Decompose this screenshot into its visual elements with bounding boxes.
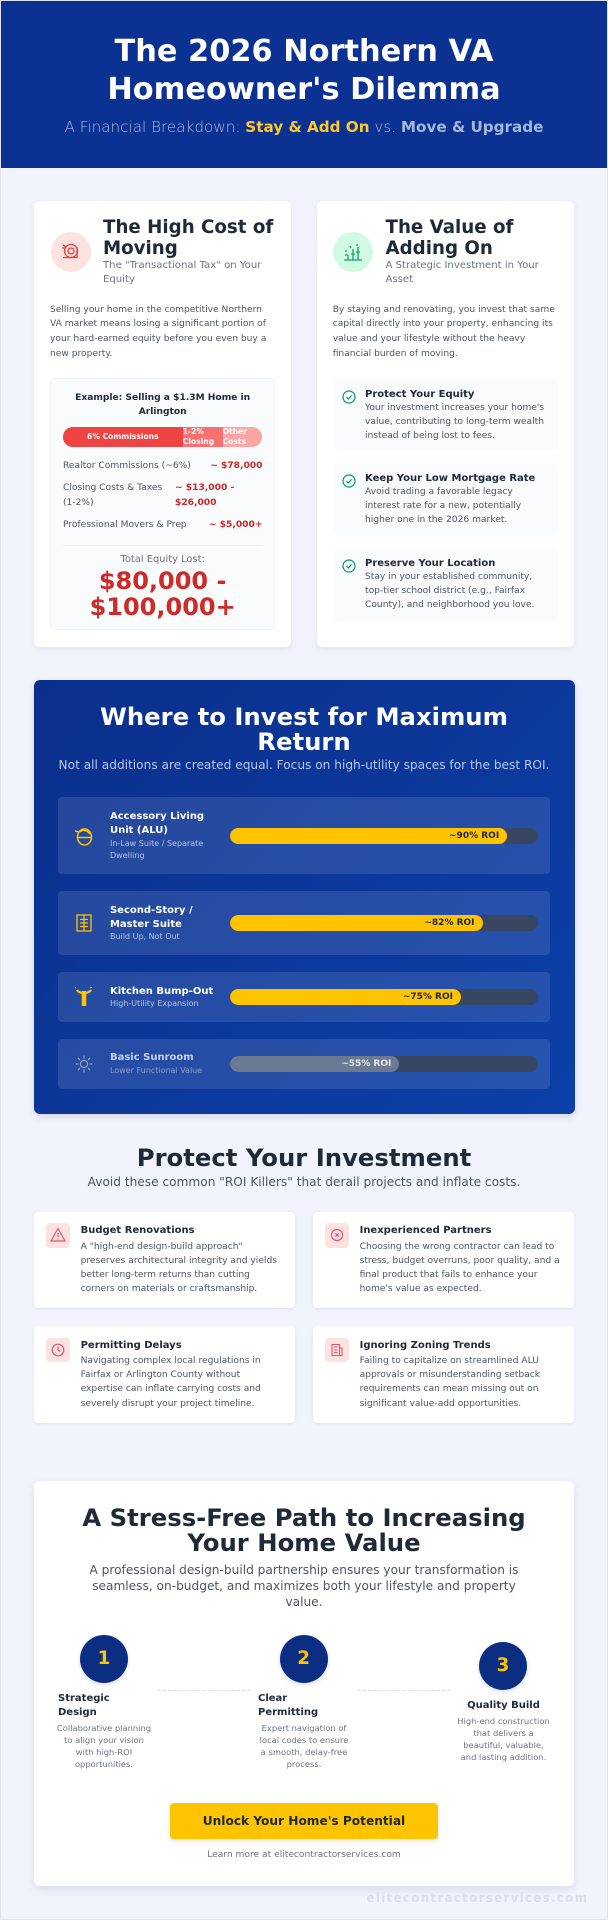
intro paragraph: financial burden of moving. — [333, 349, 458, 359]
section heading: protect your investment: Protect Your Investment — [137, 1143, 471, 1172]
step title — [58, 1693, 110, 1718]
row: closing costs — [63, 483, 234, 508]
step text: local codes to ensure — [260, 1735, 348, 1745]
section subtitle: Avoid these common "ROI Killers" that derail projects and inflate costs. — [88, 1175, 520, 1189]
commissions segment — [63, 427, 183, 447]
icon: check — [342, 559, 356, 573]
roi row: second story — [58, 891, 550, 955]
card text — [81, 1356, 261, 1408]
row title: Unit (ALU) — [110, 825, 168, 836]
intro paragraph: By staying and renovating, you invest that same — [333, 304, 555, 314]
benefit: protect equity — [334, 379, 558, 451]
icon: check — [342, 474, 356, 488]
benefit: low mortgage rate — [334, 463, 558, 536]
icon: ALU — [74, 828, 92, 846]
roi row: sunroom — [58, 1039, 550, 1089]
intro paragraph: VA market means losing a significant portion of — [50, 319, 266, 329]
closing segment: Closing — [183, 437, 214, 446]
card text: expertise can inflate carrying costs and — [81, 1384, 261, 1394]
step text: process. — [287, 1759, 321, 1769]
icon: second story — [76, 914, 92, 932]
benefit title: Preserve Your Location — [365, 558, 495, 569]
roi row: kitchen — [58, 972, 550, 1022]
call to action button: Unlock Your Home's Potential — [203, 1814, 405, 1828]
step title: Design — [58, 1707, 97, 1718]
row: closing costs: (1-2%) — [63, 498, 94, 508]
card text: approvals or misunderstanding setback — [360, 1370, 540, 1380]
card title: Budget Renovations — [81, 1225, 195, 1236]
section subtitle: seamless, on-budget, and maximizes both your lifestyle and property — [92, 1579, 516, 1593]
heading — [386, 217, 514, 259]
row: closing costs: $26,000 — [175, 498, 216, 508]
section heading: Return — [257, 726, 351, 756]
icon: warning — [46, 1223, 70, 1248]
roi bar 82% — [230, 915, 538, 931]
icon: sun — [76, 1056, 92, 1072]
card text: A "high-end design-build approach" — [81, 1242, 243, 1252]
section subtitle: Not all additions are created equal. Focus on high-utility spaces for the best ROI. — [59, 758, 549, 772]
benefit text: top-tier school district (e.g., Fairfax — [365, 586, 525, 596]
row title: Second-Story / — [110, 905, 193, 916]
stacked cost bar — [63, 427, 262, 447]
roi bar 82%: ~82% ROI — [424, 918, 475, 928]
card text: Fairfax or Arlington County without — [81, 1370, 240, 1380]
other costs segment: Other — [223, 427, 247, 436]
row: realtor commissions: Realtor Commissions (~6%) — [63, 461, 191, 471]
step 1 — [57, 1635, 151, 1769]
heading: The High Cost of — [103, 217, 273, 238]
step text — [57, 1723, 151, 1769]
call to action button — [170, 1803, 438, 1839]
benefit text — [365, 402, 544, 441]
roi bar 90% — [230, 828, 538, 844]
killer card: budget renovations — [34, 1212, 295, 1308]
step title: Permitting — [258, 1707, 318, 1718]
step text: with high-ROI — [76, 1747, 132, 1757]
row title: Basic Sunroom — [110, 1052, 194, 1063]
benefit text: Avoid trading a favorable legacy — [365, 487, 513, 497]
step text: opportunities. — [75, 1759, 133, 1769]
benefit text — [365, 487, 521, 525]
step text: that delivers a — [473, 1728, 534, 1738]
step text: Expert navigation of — [262, 1723, 346, 1733]
title — [107, 34, 501, 107]
row description: Build Up, Not Out — [110, 932, 180, 941]
sub-heading — [102, 260, 262, 285]
header banner — [0, 0, 608, 168]
benefit: preserve location — [334, 548, 558, 621]
sub-heading: Equity — [103, 274, 135, 285]
row description: Lower Functional Value — [110, 1066, 202, 1075]
step number — [479, 1642, 527, 1690]
sub-heading: The "Transactional Tax" on Your — [103, 260, 261, 271]
card text: requirements can mean missing out on — [360, 1384, 538, 1394]
card text — [360, 1242, 560, 1294]
row description: In-Law Suite / Separate — [110, 839, 203, 848]
benefit text: interest rate for a new, potentially — [365, 501, 521, 511]
icon: x circle — [325, 1223, 349, 1248]
step text: and lasting addition. — [461, 1752, 546, 1762]
section subtitle: A professional design-build partnership ensures your transformation is — [89, 1563, 518, 1577]
benefit text — [365, 572, 534, 610]
benefit text: County), and neighborhood you love. — [365, 600, 534, 610]
card text: corners on materials or craftsmanship. — [81, 1284, 257, 1294]
card title: Inexperienced Partners — [360, 1225, 492, 1236]
card text: Failing to capitalize on streamlined ALU — [360, 1356, 539, 1366]
step number: 2 — [297, 1648, 310, 1669]
row: movers: ~ $5,000+ — [209, 520, 262, 530]
row: realtor commissions — [63, 461, 262, 471]
heading — [103, 217, 274, 259]
cost example box — [50, 378, 275, 630]
step title: Clear — [258, 1693, 287, 1704]
card text: significant value-add opportunities. — [360, 1398, 521, 1408]
example title — [75, 393, 250, 417]
killer card: inexperienced partners — [313, 1212, 574, 1308]
row: closing costs: Closing Costs & Taxes — [63, 483, 162, 493]
benefit title: Protect Your Equity — [365, 388, 474, 400]
card text: better long-term returns than cutting — [81, 1270, 250, 1280]
total amount — [90, 567, 236, 621]
section heading: Where to Invest for Maximum — [100, 702, 508, 730]
benefit text: instead of being lost to fees. — [365, 431, 495, 441]
total amount: $100,000+ — [90, 593, 236, 621]
card title: Ignoring Zoning Trends — [360, 1340, 491, 1351]
section heading — [100, 702, 508, 756]
panel: high cost of moving — [34, 201, 291, 647]
panel: value of adding on — [317, 201, 574, 647]
step text — [454, 1715, 554, 1763]
closing segment: 1-2% — [183, 427, 204, 436]
icon: green growth chart — [333, 232, 373, 272]
icon: check — [342, 390, 356, 404]
roi bar 55%: ~55% ROI — [341, 1059, 391, 1069]
commissions segment: 6% Commissions — [87, 432, 159, 441]
total label: Total Equity Lost: — [120, 554, 205, 565]
step text — [260, 1723, 348, 1769]
row: movers — [63, 520, 262, 530]
benefit text: higher one in the 2026 market. — [365, 515, 507, 525]
row title — [110, 811, 204, 836]
row description — [110, 839, 203, 860]
icon: red target coil — [51, 232, 91, 272]
card text: home's value as expected. — [360, 1284, 482, 1294]
sub-heading: Asset — [386, 274, 413, 285]
card text: stress, budget overruns, poor quality, and a — [360, 1256, 560, 1266]
heading: Adding On — [386, 238, 493, 259]
roi bar 75% — [230, 989, 538, 1005]
title: Homeowner's Dilemma — [107, 72, 501, 107]
row title: Kitchen Bump-Out — [110, 986, 213, 997]
heading: Moving — [103, 238, 178, 259]
section heading: Your Home Value — [187, 1528, 421, 1557]
killer card: zoning trends — [313, 1326, 574, 1423]
row description: High-Utility Expansion — [110, 999, 199, 1008]
intro paragraph: new property. — [50, 349, 112, 359]
intro paragraph — [50, 304, 266, 359]
section heading — [82, 1503, 526, 1557]
example title: Arlington — [139, 407, 187, 417]
card text: final product that fails to enhance your — [360, 1270, 537, 1280]
killer card: permitting delays — [34, 1326, 295, 1423]
sub-heading — [386, 260, 539, 285]
row title — [110, 905, 193, 930]
icon: clock — [46, 1338, 70, 1362]
other costs segment — [223, 427, 247, 446]
card text — [80, 1242, 277, 1294]
section heading: A Stress-Free Path to Increasing — [82, 1503, 526, 1532]
intro paragraph: capital directly into your property, enhancing its — [333, 319, 553, 329]
roi bar 75%: ~75% ROI — [403, 992, 453, 1002]
row title: Master Suite — [110, 919, 182, 930]
step number — [80, 1635, 128, 1683]
step text: a smooth, delay-free — [261, 1747, 347, 1757]
step title: Quality Build — [467, 1700, 540, 1711]
row: movers: Professional Movers & Prep — [63, 520, 187, 530]
card text: severely disrupt your project timeline. — [81, 1398, 255, 1408]
icon: document — [325, 1338, 349, 1362]
benefit text: Your investment increases your home's — [365, 402, 544, 412]
row description: Dwelling — [110, 851, 144, 860]
roi bar 55% — [230, 1056, 538, 1072]
card text — [360, 1356, 540, 1408]
row: closing costs: ~ $13,000 - — [175, 483, 234, 493]
step number: 3 — [497, 1655, 509, 1676]
step text: High-end construction — [457, 1716, 550, 1726]
step number: 1 — [98, 1648, 110, 1669]
step title — [258, 1693, 318, 1718]
step text: Collaborative planning — [57, 1723, 151, 1733]
heading: The Value of — [386, 217, 513, 238]
roi row: ALU — [58, 797, 550, 874]
intro paragraph: value and your lifestyle without the heavy — [333, 334, 525, 344]
section subtitle: value. — [285, 1595, 323, 1609]
sub-heading: A Strategic Investment in Your — [386, 260, 539, 271]
intro paragraph: your hard-earned equity before you even buy a — [50, 334, 266, 344]
card text: preserves architectural integrity and yields — [81, 1256, 277, 1266]
panel: stress-free path — [34, 1481, 574, 1886]
step text: to align your vision — [64, 1735, 144, 1745]
step number — [280, 1635, 328, 1683]
step 3 — [454, 1641, 554, 1765]
watermark: elitecontractorservices.com — [366, 1891, 588, 1905]
step title: Strategic — [58, 1693, 110, 1704]
card text: Choosing the wrong contractor can lead to — [360, 1242, 554, 1252]
benefit text: value, contributing to long-term wealth — [365, 417, 544, 427]
section subtitle — [89, 1563, 518, 1609]
title: The 2026 Northern VA — [114, 34, 493, 68]
step 2 — [258, 1635, 348, 1769]
closing segment — [183, 427, 223, 447]
row: realtor commissions: ~ $78,000 — [210, 461, 262, 471]
card title: Permitting Delays — [81, 1340, 182, 1351]
benefit title: Keep Your Low Mortgage Rate — [365, 473, 535, 484]
card text: Navigating complex local regulations in — [81, 1356, 261, 1366]
panel: where to invest — [34, 680, 574, 1114]
intro paragraph — [332, 304, 555, 359]
total amount: $80,000 - — [99, 567, 226, 595]
example title: Example: Selling a $1.3M Home in — [75, 393, 250, 403]
intro paragraph: Selling your home in the competitive Northern — [50, 304, 262, 314]
subtitle: A Financial Breakdown: Stay & Add On vs. Move & Upgrade — [65, 118, 543, 136]
step text: beautiful, valuable, — [463, 1740, 544, 1750]
roi bar 90%: ~90% ROI — [449, 831, 499, 841]
other costs segment: Costs — [223, 437, 246, 446]
benefit text: Stay in your established community, — [365, 572, 532, 582]
website line: Learn more at elitecontractorservices.com — [207, 1850, 401, 1860]
row title: Accessory Living — [110, 811, 204, 822]
icon: kitchen — [74, 987, 92, 1006]
